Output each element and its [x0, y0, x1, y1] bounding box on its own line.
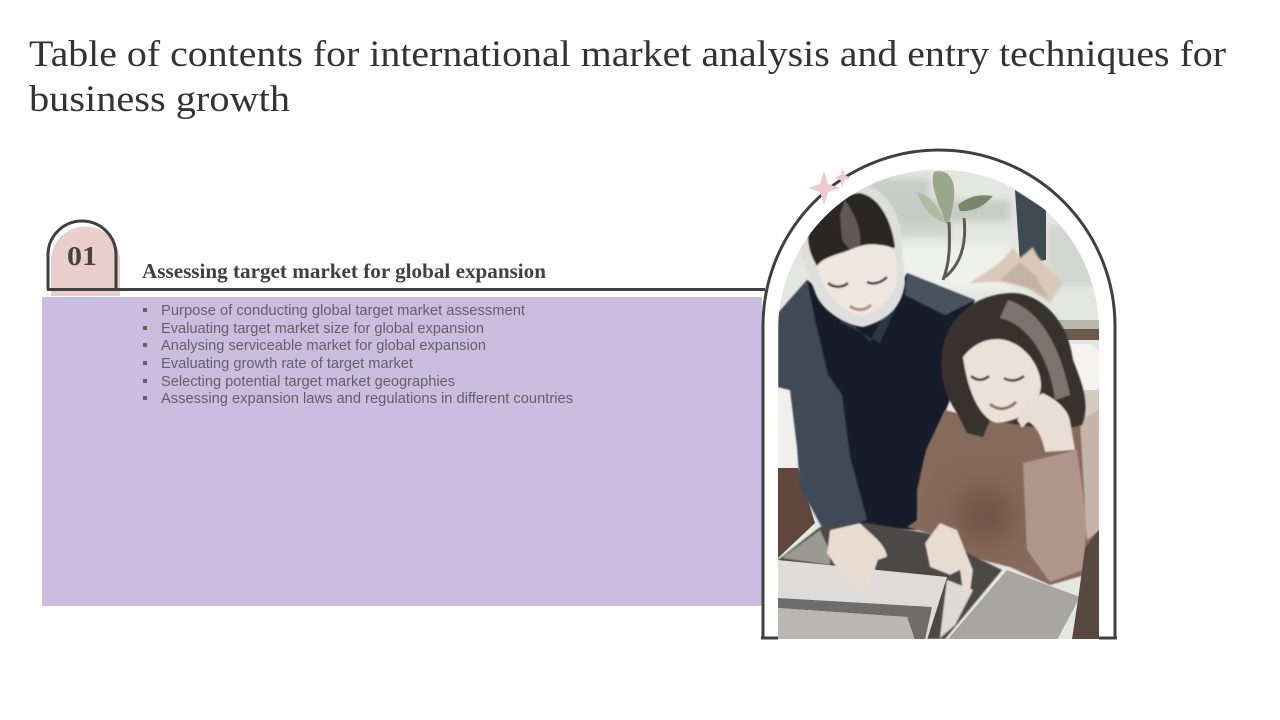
woman two: hand on cheek: [1017, 393, 1075, 452]
table: [778, 523, 1002, 639]
title: business growth: [29, 79, 291, 120]
bullet list: [143, 303, 573, 407]
bullet list: Evaluating growth rate of target market: [161, 356, 413, 372]
section heading: Assessing target market for global expansion: [142, 259, 546, 283]
panel: lilac content background: [42, 297, 762, 606]
arch frame: [763, 150, 1115, 638]
woman two: sweater: [907, 410, 1099, 585]
section number tab: [47, 221, 765, 296]
icon: pink sparkle stars: [808, 168, 851, 205]
section number: 01: [67, 241, 97, 271]
window frame: [1015, 190, 1046, 264]
title: Table of contents for international market analysis and entry techniques for: [29, 34, 1226, 75]
open laptop: [778, 560, 947, 640]
woman two: head and hair: [941, 293, 1085, 437]
tab outline and divider line: [47, 221, 765, 290]
window sill: [1053, 320, 1099, 430]
woman one: head and scarf: [800, 187, 905, 327]
left person fragment: [778, 388, 815, 558]
window background: [778, 170, 1099, 639]
photo: two women working at a laptop: [778, 170, 1099, 640]
bullet list: Evaluating target market size for global expansion: [161, 321, 484, 337]
pink tab fill: [51, 226, 120, 296]
woman one: body: [778, 273, 975, 535]
bullet list: Purpose of conducting global target market assessment: [161, 303, 525, 319]
bullet list: Selecting potential target market geographies: [161, 374, 455, 390]
hands on laptop: [827, 523, 973, 593]
plant: [917, 171, 993, 280]
bullet list: Assessing expansion laws and regulations in different countries: [161, 391, 573, 407]
closed laptop: [947, 570, 1080, 640]
plaid cloth: [1072, 530, 1099, 639]
title: [29, 34, 1226, 120]
bullet list: Analysing serviceable market for global expansion: [161, 338, 486, 354]
frame base ticks: [761, 636, 1117, 640]
dried flowers: [970, 247, 1063, 303]
